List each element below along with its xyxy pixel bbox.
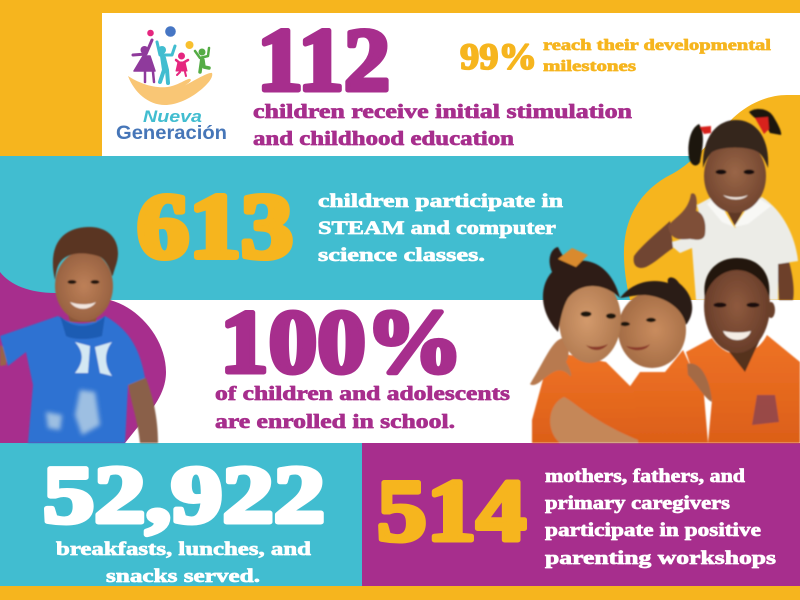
- caption: developmental milestones: milestones: [543, 58, 636, 75]
- caption: meals served: breakfasts, lunches, and: [56, 540, 312, 560]
- eyes and smile: [716, 170, 754, 200]
- caption: enrolled in school: of children and adolescents: [215, 384, 511, 405]
- yellow blob behind girl: [624, 95, 800, 300]
- caption: STEAM classes: science classes.: [318, 245, 485, 266]
- stat: 100% enrolled: [215, 293, 511, 433]
- number: 100%: 100%: [220, 293, 463, 392]
- middle girl shirt: [626, 350, 708, 443]
- head: [704, 139, 766, 213]
- left girl head: [559, 277, 621, 363]
- caption: developmental milestones: [543, 37, 772, 75]
- caption: children receive early stimulation: [253, 102, 632, 150]
- middle girl head: [618, 292, 686, 368]
- logo text: Generación: Generación: [116, 122, 227, 144]
- eyes and smile: [68, 280, 100, 309]
- caption: parenting workshops: mothers, fathers, and: [545, 467, 746, 487]
- logo: Nueva Generación: [116, 26, 227, 144]
- boy head: [704, 259, 770, 353]
- arm with thumb up: [634, 221, 673, 268]
- boy shirt emblem: [752, 395, 779, 425]
- shirt logo: [75, 342, 112, 376]
- arms: [128, 378, 158, 443]
- logo icon: hand: [128, 73, 212, 105]
- caption: meals served: snacks served.: [106, 567, 260, 587]
- photo: boy in blue shirt: [0, 227, 158, 443]
- caption: meals served: [56, 540, 312, 587]
- caption: enrolled in school: are enrolled in school.: [215, 412, 455, 433]
- stat: 613 STEAM: [137, 175, 564, 277]
- caption: parenting workshops: [545, 467, 776, 569]
- left girl hair clip: [558, 248, 588, 267]
- logo icon: children: [133, 40, 209, 83]
- caption: parenting workshops: primary caregivers: [545, 494, 730, 514]
- lower hand and forearm: [550, 397, 638, 443]
- number: 99%: 99%: [460, 37, 537, 78]
- number: 613: 613: [137, 175, 293, 277]
- white shirt: [668, 197, 798, 300]
- caption: STEAM classes: children participate in: [318, 191, 564, 212]
- number: 112: 112: [257, 11, 390, 110]
- caption: parenting workshops: parenting workshops: [545, 549, 776, 569]
- left girl face: [580, 311, 616, 350]
- stat: 99% milestones: [460, 37, 772, 78]
- left girl hair: [543, 247, 620, 332]
- middle girl face: [620, 318, 656, 350]
- boy face: [714, 302, 760, 340]
- head: [55, 251, 113, 321]
- stat: 514 caregivers: [377, 463, 776, 569]
- caption: enrolled in school: [215, 384, 511, 433]
- middle girl: [618, 277, 712, 443]
- purple blob behind boy: [0, 272, 166, 443]
- red ribbons: [700, 117, 769, 134]
- caption: children receive early stimulation: and childhood education: [253, 129, 514, 150]
- pigtails: [688, 109, 781, 165]
- hair: [53, 227, 118, 280]
- boy hair: [704, 258, 769, 298]
- boy neck: [716, 335, 762, 372]
- collar: [707, 196, 771, 227]
- boy on right: [686, 258, 800, 443]
- logo text: Nueva: Nueva: [143, 108, 202, 126]
- neck: [66, 305, 98, 322]
- left girl: [530, 247, 640, 443]
- logo icon: balls: [147, 26, 194, 49]
- photo: girl giving thumbs up: [634, 109, 798, 300]
- blue shirt: [0, 316, 145, 443]
- caption: STEAM classes: STEAM and computer: [318, 218, 557, 239]
- neck: [720, 198, 750, 226]
- number: 52,922: 52,922: [43, 449, 325, 540]
- number: 514: 514: [377, 463, 526, 560]
- middle girl hair: [620, 277, 692, 325]
- stat: 52,922 meals: [43, 449, 325, 587]
- photo: three children in orange shirts: [530, 247, 800, 443]
- caption: developmental milestones: reach their developmental: [543, 37, 772, 54]
- boy shirt: [686, 335, 800, 443]
- hand on boy shoulder: [687, 363, 712, 402]
- left girl shirt: [532, 354, 640, 443]
- far arm: [777, 258, 794, 300]
- caption: children receive early stimulation: children receive initial stimulation: [253, 102, 632, 123]
- boy ear: [767, 302, 775, 318]
- shirt splash: [46, 390, 100, 435]
- caption: parenting workshops: participate in positive: [545, 521, 761, 541]
- hair: [703, 120, 768, 168]
- caption: STEAM classes: [318, 191, 564, 266]
- hugging arm: [530, 338, 571, 385]
- stat: 112 children: [253, 11, 632, 150]
